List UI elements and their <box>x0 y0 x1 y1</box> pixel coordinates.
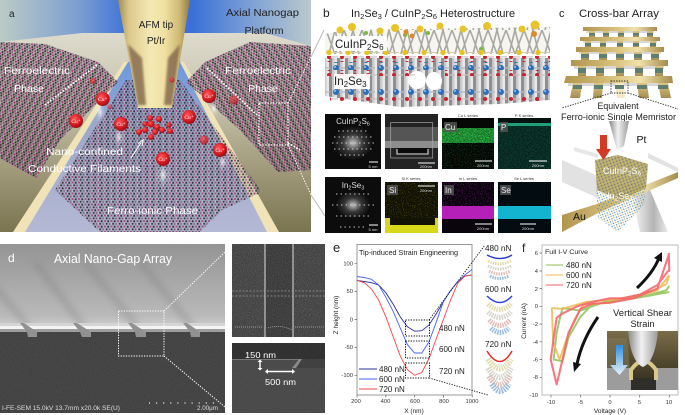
legend: 600 nN <box>566 271 592 280</box>
panel d: SEM of nano-gap array <box>0 244 225 413</box>
y axis labels: 50 <box>347 289 353 295</box>
crossbar illustration <box>564 27 673 98</box>
curve 600 nN <box>552 275 669 360</box>
y axis labels: 0 <box>535 304 538 310</box>
legend: 720 nN <box>379 385 405 394</box>
y axis title: Z height (nm) <box>333 296 340 334</box>
title b: 6 <box>433 12 437 21</box>
Si map: Si <box>389 186 396 195</box>
panel f: I-V curve chart <box>521 241 678 415</box>
axis ticks <box>540 253 669 398</box>
P map: P K series <box>515 113 533 118</box>
AFM tip <box>118 0 190 108</box>
plot frame <box>542 245 678 395</box>
FFT image CuInP2S6: CuInP <box>336 117 358 126</box>
SEM lower substrate <box>0 332 225 413</box>
P map: 200nm <box>532 163 545 168</box>
strain stack 480 nN <box>485 244 512 278</box>
SEM upper surface <box>0 244 225 328</box>
x axis labels: 200 <box>351 399 361 405</box>
grey bottom electrodes <box>562 147 678 232</box>
FFT image In2Se3: Se <box>351 181 362 190</box>
title d: Axial Nano-Gap Array <box>54 252 173 266</box>
x axis labels: 5 <box>638 400 641 406</box>
title b: 3 <box>378 12 382 21</box>
diagonal trench shadows <box>0 262 195 330</box>
x axis labels: 600 <box>410 399 420 405</box>
In2Se3 tag: In <box>334 76 344 88</box>
Cu ions: Cu⁺ <box>204 93 214 100</box>
y axis labels: -2 <box>533 322 538 328</box>
cream electrode edges <box>13 62 279 232</box>
force labels in plot: 720 nN <box>439 367 465 376</box>
Se map: 200nm <box>522 226 535 231</box>
axis ticks <box>354 264 472 398</box>
strain stack 600 nN: 600 nN <box>485 285 511 294</box>
AFM tip label: AFM tip <box>139 20 174 31</box>
x axis labels: 10 <box>666 400 672 406</box>
label f: f <box>522 241 526 255</box>
Cu ions: Cu⁺ <box>158 156 168 163</box>
Pt label: Pt <box>636 134 647 146</box>
In map: In L series <box>459 176 477 181</box>
In2Se3 tag: Se <box>348 76 362 88</box>
SEM scale <box>149 403 218 412</box>
x axis labels <box>351 399 478 405</box>
FFT image In2Se3 <box>325 177 381 233</box>
Cu map: 200nm <box>477 163 490 168</box>
dotted boxes <box>406 320 430 378</box>
sweep arrow up <box>637 252 662 288</box>
In map: In <box>445 186 452 195</box>
right phase label: Phase <box>248 83 278 95</box>
y axis labels: 4 <box>535 269 539 275</box>
In map: 200nm <box>477 226 490 231</box>
label a: a <box>9 9 15 20</box>
left phase label <box>4 65 70 95</box>
platform heading: Platform <box>244 25 284 37</box>
SEM scale: 2.00µm <box>197 406 218 412</box>
CuInP2S6 label: 6 <box>638 170 642 178</box>
gold Au electrode <box>562 172 678 232</box>
Au label: Au <box>573 211 586 223</box>
Pt probe <box>609 121 629 150</box>
y axis labels: -10 <box>530 393 538 399</box>
small arrow to filaments <box>131 140 143 158</box>
Se map: Se L series <box>514 176 534 181</box>
shear strain caption: Vertical Shear <box>613 308 672 318</box>
CuInP2S6 tag: S <box>371 39 379 51</box>
force labels in plot <box>439 324 465 376</box>
SEM metadata: I-FE-SEM 15.0kV 13.7mm x20.0k SE(U) <box>2 406 120 412</box>
In2Se3 label: Se <box>618 191 629 201</box>
legend: 720 nN <box>566 281 592 290</box>
Si map: Si K series <box>401 176 421 181</box>
chart title: Tip-induced Strain Engineering <box>359 248 458 257</box>
In2Se3 tag: 3 <box>362 80 367 89</box>
bar shadows <box>568 31 668 86</box>
left lattice: ferroelectric phase <box>0 42 118 178</box>
CuInP2S6 tag <box>334 36 387 52</box>
legend: 600 nN <box>379 375 405 384</box>
y axis labels: 100 <box>343 262 353 268</box>
bright ridge <box>0 323 225 332</box>
title b: S <box>425 8 433 20</box>
van der Waals hollows <box>408 71 442 90</box>
y axis labels: 6 <box>535 251 538 257</box>
FFT image In2Se3: 5 nm <box>369 227 378 232</box>
title b: In <box>351 8 360 20</box>
gold column segments <box>578 31 663 76</box>
In2Se3 lattice block <box>596 182 646 232</box>
right phase label: Ferroelectric <box>225 65 291 77</box>
lower yellow row <box>325 50 550 57</box>
red arrow <box>596 135 611 160</box>
In2Se3 tag: 2 <box>344 80 349 89</box>
trenches <box>20 323 200 337</box>
x axis labels: -10 <box>547 400 555 406</box>
In2Se3 tag <box>334 74 370 89</box>
filaments label <box>28 146 141 175</box>
FFT image CuInP2S6: 5 nm <box>369 164 378 169</box>
blue arrow <box>610 345 628 375</box>
strain stack 720 nN <box>485 340 512 391</box>
legend: 480 nN <box>379 365 405 374</box>
y axis labels: 2 <box>535 287 538 293</box>
x axis labels <box>547 400 672 406</box>
equivalent memristor caption <box>561 101 676 122</box>
ion trails <box>94 96 229 189</box>
accent atoms <box>364 30 537 51</box>
x axis title: X (nm) <box>404 408 424 415</box>
P map: P <box>501 123 506 132</box>
x axis labels: -5 <box>578 400 583 406</box>
shear strain caption: Strain <box>630 319 655 329</box>
title b: Heterostructure <box>437 8 515 20</box>
nanogap floor <box>18 62 272 232</box>
dotted region and zoom lines <box>118 252 225 407</box>
left phase label: Phase <box>14 83 44 95</box>
Cu map <box>442 113 494 169</box>
Cu ions: Cu⁺ <box>184 114 194 121</box>
Se map <box>498 176 551 233</box>
panel c: cross-bar array <box>559 8 678 232</box>
panel b: heterostructure <box>323 6 551 233</box>
label c: c <box>559 8 565 20</box>
y axis labels <box>530 251 539 399</box>
CuInP2S6 label: CuInP <box>603 166 628 176</box>
FFT image In2Se3: 3 <box>361 186 364 192</box>
label b: b <box>323 6 330 20</box>
platform heading <box>226 7 299 37</box>
conductive filament cluster <box>90 78 239 145</box>
sweep arrow down <box>573 317 598 372</box>
SEM inset top view <box>232 244 325 337</box>
FFT image CuInP2S6: 6 <box>367 122 370 128</box>
strain stack 480 nN: 480 nN <box>485 244 511 253</box>
Cu ions: Cu⁺ <box>98 96 107 103</box>
In2Se3 label: 2 <box>615 196 619 202</box>
y axis labels: -8 <box>533 375 538 381</box>
equivalent memristor caption: Ferro-ionic Single Memristor <box>561 112 676 122</box>
Se map: Se <box>501 186 511 195</box>
left phase label: Ferroelectric <box>4 65 70 77</box>
CuInP2S6 label: S <box>632 166 638 176</box>
title b: / CuInP <box>382 8 421 20</box>
bottom stubs <box>570 83 671 98</box>
Cu ions: Cu⁺ <box>215 147 225 154</box>
strain stack 600 nN <box>485 285 512 332</box>
P map <box>498 113 551 169</box>
panel e: strain engineering chart <box>333 240 512 415</box>
Cu ions <box>69 89 227 166</box>
force labels in plot: 480 nN <box>439 324 465 333</box>
platform plateaus and base <box>0 33 311 232</box>
CuInP2S6 lattice block <box>595 155 648 200</box>
Pt/Ir label: Pt/Ir <box>147 36 166 47</box>
y axis labels <box>341 262 353 379</box>
yellow sulphur top <box>336 20 540 34</box>
title b: 2 <box>421 12 425 21</box>
x axis labels: 800 <box>439 399 449 405</box>
right lattice: ferroelectric phase <box>186 42 311 172</box>
y axis labels: 0 <box>350 318 353 324</box>
panel a: axial nanogap platform <box>0 0 311 232</box>
shear inset illustration <box>607 331 678 390</box>
Si map <box>385 176 438 233</box>
filaments label: Nano-confined <box>46 146 123 158</box>
title b: 2 <box>360 12 364 21</box>
horizontal electrodes <box>564 27 673 83</box>
zoom guide lines <box>429 245 488 395</box>
In map <box>442 176 494 233</box>
memristor illustration <box>562 121 678 232</box>
150 nm dimension: 150 nm <box>245 350 276 360</box>
y axis labels: -4 <box>533 340 539 346</box>
Cu map: Cu L series <box>458 113 478 118</box>
I-V curves <box>551 253 669 384</box>
strain stack 720 nN: 720 nN <box>485 340 511 349</box>
x axis labels: 0 <box>608 400 612 406</box>
atom rows <box>325 56 550 103</box>
In2Se3 columns <box>325 58 550 107</box>
CuInP2S6 label: 2 <box>628 170 632 178</box>
Cu ions: Cu⁺ <box>71 118 81 125</box>
memristor cells <box>573 33 668 89</box>
phase boundary dotted lines <box>45 65 300 150</box>
chart title: Full I-V Curve <box>545 249 588 256</box>
x axis title: Voltage (V) <box>594 408 626 415</box>
Cu map: Cu <box>445 123 455 132</box>
label e: e <box>333 240 340 255</box>
STEM image: 200nm <box>420 164 433 169</box>
In2Se3 label: 3 <box>629 196 633 202</box>
CuInP2S6 layer <box>325 27 550 54</box>
platform heading: Axial Nanogap <box>226 7 299 19</box>
equivalent memristor caption: Equivalent <box>597 101 639 111</box>
FFT image CuInP2S6: 2 <box>358 122 361 128</box>
filaments label: Conductive Filaments <box>28 163 141 175</box>
FFT image In2Se3: In <box>342 181 348 190</box>
y axis title: Current (nA) <box>521 303 528 339</box>
FFT image In2Se3: 2 <box>348 186 351 192</box>
STEM image <box>385 114 438 169</box>
y axis labels: -6 <box>533 358 538 364</box>
right phase label <box>225 65 291 95</box>
CuInP2S6 tag: CuInP <box>335 39 367 51</box>
zoom connectors a to b <box>288 57 311 195</box>
shear strain caption <box>613 308 672 329</box>
legend <box>546 261 592 290</box>
y axis labels: -50 <box>345 345 353 351</box>
curve 600 nN <box>357 269 472 353</box>
x axis labels: 400 <box>381 399 390 405</box>
legend: 480 nN <box>566 261 592 270</box>
curve 480 nN <box>554 286 669 361</box>
ferro-ionic label: Ferro-ionic Phase <box>107 205 198 217</box>
label d: d <box>8 251 15 265</box>
legend <box>359 365 405 394</box>
force labels in plot: 600 nN <box>439 345 465 354</box>
FFT image CuInP2S6: S <box>361 117 367 126</box>
crystal structure illustration <box>325 20 550 107</box>
CuInP2S6 tag: 6 <box>379 43 384 52</box>
Si map: 200nm <box>420 188 433 193</box>
FFT image CuInP2S6 <box>325 114 381 169</box>
noise overlay <box>0 244 225 413</box>
SEM inset cross-section <box>232 343 325 413</box>
curve 720 nN <box>551 253 669 384</box>
centre stub <box>615 83 625 98</box>
500 nm dimension: 500 nm <box>265 377 296 387</box>
plot frame <box>357 244 472 395</box>
background sky <box>0 0 311 232</box>
centre lattice: ferro-ionic phase <box>55 80 262 232</box>
Cu ions: Cu⁺ <box>116 121 126 128</box>
title c: Cross-bar Array <box>579 8 660 20</box>
curve 480 nN <box>357 275 472 331</box>
curve 720 nN <box>357 275 472 375</box>
In2Se3 label: In <box>607 191 615 201</box>
grey funnel lines <box>311 30 325 216</box>
title b: Se <box>364 8 378 20</box>
x axis labels: 1000 <box>466 399 478 405</box>
CuInP2S6 tag: 2 <box>367 43 372 52</box>
y axis labels: -100 <box>341 373 353 379</box>
dotted selection and guide lines <box>562 81 678 109</box>
selection square <box>259 103 288 145</box>
